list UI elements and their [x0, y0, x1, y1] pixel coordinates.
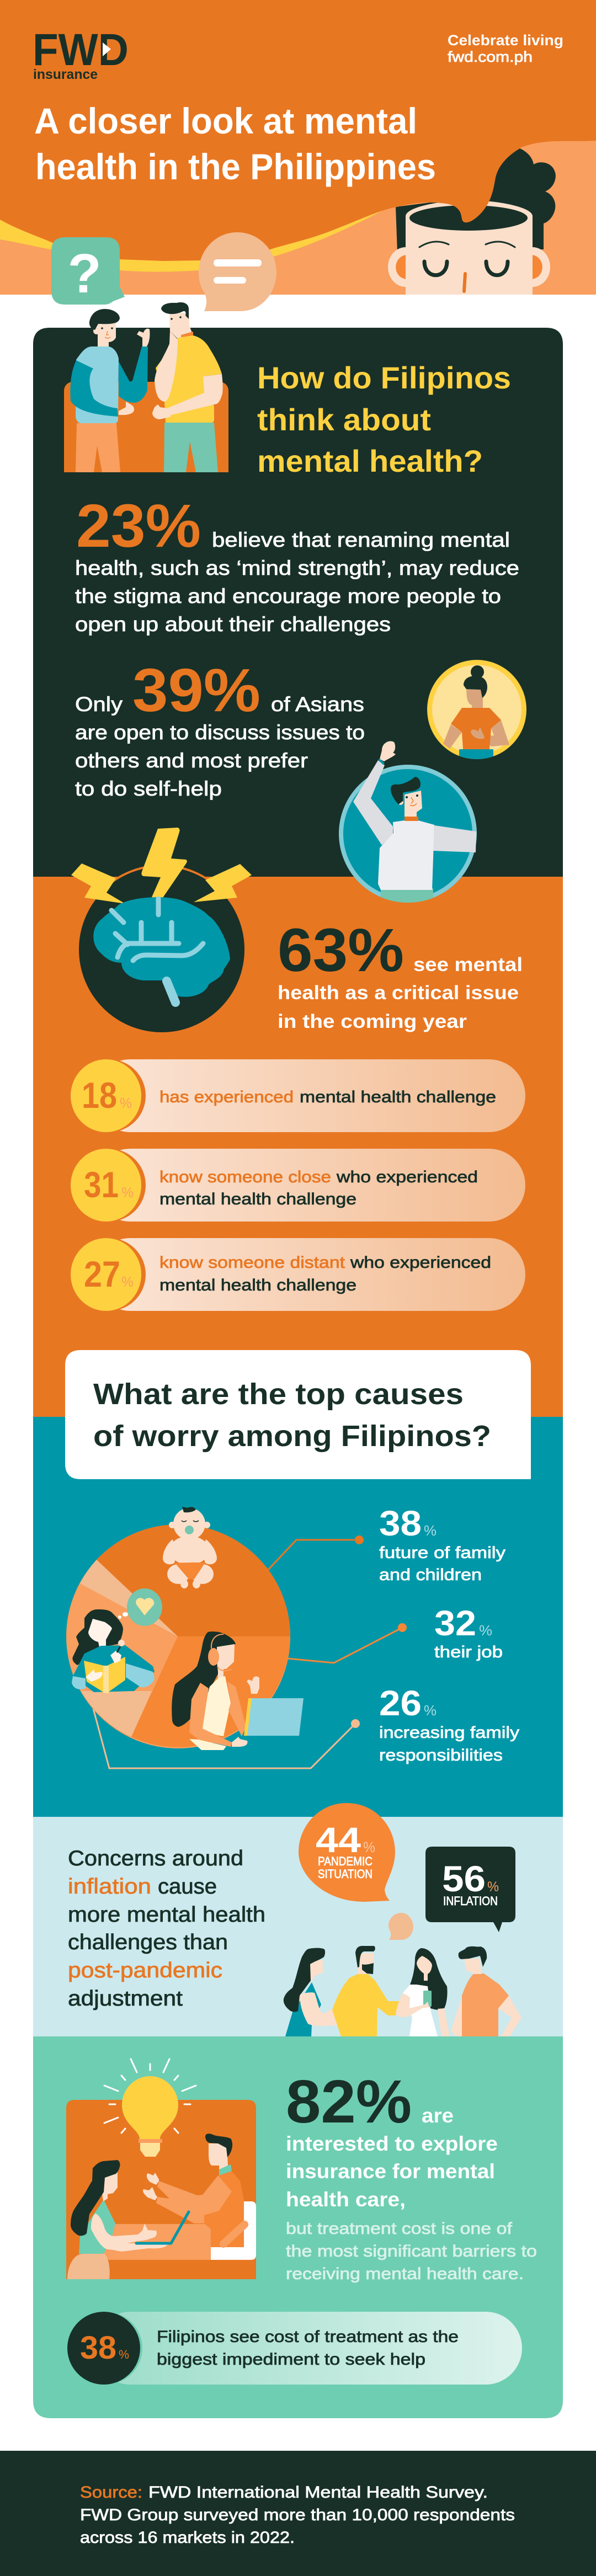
pill: 18 percent: mental health challenge [300, 1088, 496, 1106]
stat: 23 percent: health, such as ‘mind strength’, may reduce [75, 557, 519, 579]
bubble: 44 percent pandemic [299, 1803, 395, 1902]
stat: 38 percent future of family: % [424, 1522, 437, 1539]
illustration: woman in circle [427, 660, 526, 761]
pill: 38 percent cost of treatment [67, 2312, 522, 2385]
icon: speech bubble [199, 232, 276, 311]
illustration: woman with headset and laptop [172, 1631, 304, 1750]
stat: 63 percent [278, 916, 523, 1032]
heading: top causes of worry: What are the top causes [93, 1378, 464, 1411]
illustration: brain with lightning [71, 828, 252, 1033]
text: treatment cost barrier: the most significant barriers to [286, 2242, 537, 2260]
stat: 38 percent future of family [379, 1503, 505, 1584]
logo: FWD insurance: insurance [33, 67, 98, 82]
text: inflation concerns [68, 1847, 265, 2010]
stat: 26 percent family responsibilities: increasing family [379, 1724, 519, 1742]
heading: top causes of worry: of worry among Filipinos? [93, 1420, 491, 1453]
illustration: four worried people [284, 1946, 522, 2036]
stat: 39 percent: 39% [132, 657, 260, 724]
bubble: 44 percent pandemic: % [363, 1839, 375, 1855]
stat: 26 percent family responsibilities: % [424, 1702, 437, 1719]
icon: question bubble: ? [67, 243, 102, 305]
pill: 38 percent cost of treatment: % [119, 2348, 129, 2361]
tagline and website [448, 32, 563, 65]
text: inflation concerns: Concerns around [68, 1847, 243, 1870]
stat: 39 percent: are open to discuss issues to [75, 721, 365, 744]
pie chart: causes of worry [66, 1507, 304, 1750]
stat: 82 percent: health care, [286, 2188, 406, 2211]
illustration: man waving in circle [339, 741, 477, 905]
pill: 27 percent [71, 1238, 525, 1311]
tagline and website: fwd.com.ph [448, 49, 533, 65]
stat: 39 percent [75, 657, 365, 800]
stat: 32 percent their job [434, 1603, 503, 1661]
pill: 31 percent: 31 [84, 1164, 119, 1205]
header background [0, 0, 596, 295]
illustration: head with open mind [388, 148, 556, 295]
footer: source [0, 2451, 596, 2576]
text: inflation concerns: adjustment [68, 1987, 183, 2010]
bubble: 56 percent inflation: % [487, 1879, 499, 1895]
stat: 23 percent: open up about their challenges [75, 613, 391, 636]
stat: 63 percent: in the coming year [278, 1011, 467, 1032]
stat: 63 percent: 63% [278, 916, 404, 984]
stat: 82 percent: 82% [286, 2068, 412, 2136]
footer: source: FWD International Mental Health Survey. [148, 2483, 488, 2502]
footer: source: FWD Group surveyed more than 10,000 respondents [80, 2506, 515, 2524]
stat: 23 percent: the stigma and encourage more people to [75, 585, 501, 607]
illustration: thought bubble heart [118, 1588, 162, 1626]
illustration: man gesturing [104, 2134, 256, 2260]
stat: 38 percent future of family: and children [379, 1566, 482, 1584]
pill: 38 percent cost of treatment: Filipinos see cost of treatment as the [157, 2328, 459, 2346]
illustration: woman with laptop [67, 2160, 189, 2279]
bubble: 44 percent pandemic: PANDEMIC [318, 1854, 372, 1868]
stat: 32 percent their job: % [479, 1622, 492, 1639]
text: inflation concerns: inflation [68, 1875, 151, 1898]
stat: 39 percent: to do self-help [75, 777, 222, 800]
text: treatment cost barrier: receiving mental health care. [286, 2265, 524, 2283]
title: health in the Philippines [35, 146, 436, 187]
pill: 18 percent: 18 [82, 1075, 117, 1116]
pill: 27 percent: know someone distant [159, 1254, 345, 1272]
pill: 27 percent: mental health challenge [159, 1276, 356, 1294]
text: inflation concerns: more mental health [68, 1903, 265, 1927]
stat: 32 percent their job: 32 [434, 1603, 476, 1643]
illustration: baby [163, 1507, 217, 1588]
pill: 38 percent cost of treatment: biggest impediment to seek help [157, 2350, 425, 2369]
icon: question bubble [51, 237, 125, 305]
heading: top causes of worry [65, 1350, 531, 1479]
illustration: woman reading [72, 1609, 155, 1694]
text: treatment cost barrier: but treatment cost is one of [286, 2220, 513, 2238]
stat: 82 percent: interested to explore [286, 2132, 498, 2155]
pill: 18 percent: % [120, 1095, 132, 1111]
pill: 31 percent [71, 1149, 525, 1222]
footer: source: Source: [80, 2483, 142, 2502]
bubble: 44 percent pandemic: 44 [316, 1820, 361, 1860]
stat: 23 percent: believe that renaming mental [212, 529, 510, 551]
text: inflation concerns: cause [158, 1875, 217, 1898]
title [34, 100, 436, 187]
card sections [33, 328, 563, 2418]
footer: source: across 16 markets in 2022. [80, 2529, 295, 2547]
icon: light bulb [104, 2059, 196, 2157]
stat: 82 percent: are [422, 2104, 454, 2127]
bubble: 56 percent inflation [425, 1847, 515, 1932]
icon: small speech bubble [389, 1913, 413, 1940]
pill: 31 percent: mental health challenge [159, 1190, 356, 1208]
illustration: idea panel [66, 2059, 256, 2279]
bubble: 56 percent inflation: 56 [442, 1858, 486, 1899]
stat: 63 percent: health as a critical issue [278, 982, 519, 1004]
connector lines [93, 1535, 407, 1768]
pill: 31 percent: % [121, 1184, 134, 1201]
stat: 26 percent family responsibilities: responsibilities [379, 1746, 503, 1764]
heading: how do Filipinos think: How do Filipinos [257, 360, 511, 395]
stat: 82 percent: insurance for mental [286, 2160, 495, 2183]
heading: how do Filipinos think [257, 360, 511, 478]
text: treatment cost barrier [286, 2220, 537, 2283]
header orange wave [0, 0, 596, 261]
stat: 39 percent: others and most prefer [75, 749, 308, 772]
stat: 23 percent: 23% [76, 492, 201, 560]
illustration: two men talking [64, 302, 228, 472]
bubble: 44 percent pandemic: SITUATION [318, 1867, 372, 1881]
stat: 38 percent future of family: 38 [379, 1503, 422, 1543]
logo: FWD insurance: FWD [33, 25, 129, 75]
text: inflation concerns: challenges than [68, 1930, 228, 1954]
tagline and website: Celebrate living [448, 32, 563, 49]
bubble: 56 percent inflation: INFLATION [443, 1894, 498, 1908]
stat: 32 percent their job: their job [434, 1643, 503, 1661]
pill: 38 percent cost of treatment: 38 [80, 2330, 116, 2366]
stat: 82 percent [286, 2068, 498, 2211]
stat: 63 percent: see mental [413, 954, 523, 975]
pill: 27 percent: 27 [84, 1254, 120, 1294]
stat: 38 percent future of family: future of family [379, 1544, 505, 1562]
heading: how do Filipinos think: mental health? [257, 444, 483, 478]
heading: how do Filipinos think: think about [257, 402, 431, 437]
text: inflation concerns: post-pandemic [68, 1959, 222, 1982]
stat: 23 percent [75, 492, 519, 636]
pill: 31 percent: know someone close [159, 1168, 331, 1186]
stat: 26 percent family responsibilities [379, 1683, 519, 1764]
pill: 31 percent: who experienced [336, 1168, 478, 1186]
pill: 18 percent: has experienced [159, 1088, 294, 1106]
stat: 26 percent family responsibilities: 26 [379, 1683, 422, 1723]
title: A closer look at mental [34, 100, 417, 141]
stat: 39 percent: of Asians [271, 693, 364, 716]
pill: 18 percent [71, 1059, 525, 1132]
pill: 27 percent: % [121, 1273, 134, 1290]
pill: 27 percent: who experienced [350, 1254, 491, 1272]
stat: 39 percent: Only [75, 693, 123, 716]
